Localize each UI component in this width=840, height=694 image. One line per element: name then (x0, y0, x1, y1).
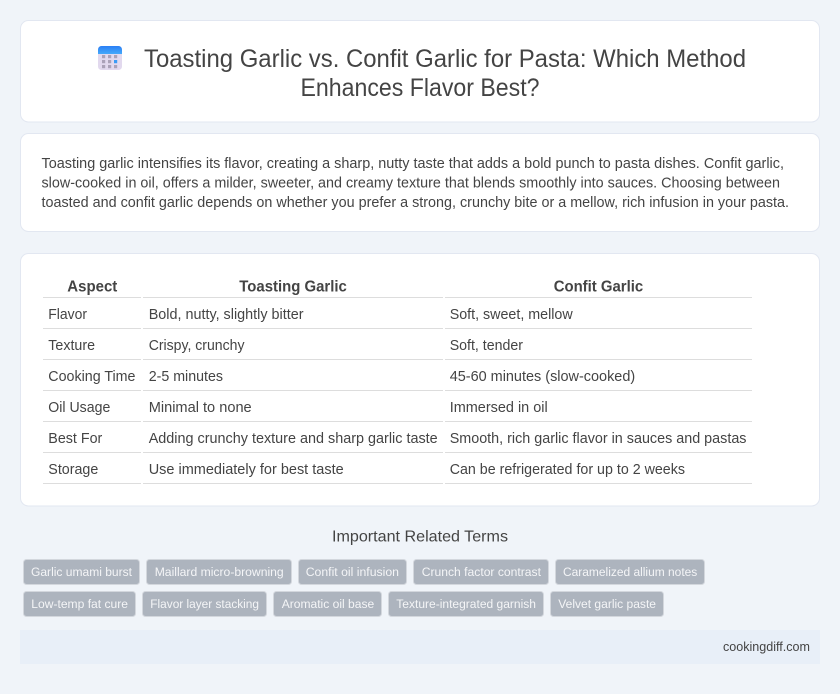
tag: confit oil infusion: Confit oil infusion (306, 565, 399, 579)
row: best for: Adding crunchy texture and sharp garlic taste (149, 431, 438, 447)
row: flavor: Bold, nutty, slightly bitter (149, 307, 304, 323)
title: Enhances Flavor Best? (300, 74, 540, 102)
tag: confit oil infusion (298, 560, 406, 584)
row: best for: Best For (48, 431, 102, 447)
panel: description (20, 134, 820, 232)
tag: maillard micro-browning: Maillard micro-browning (155, 565, 284, 579)
row: cooking time: 2-5 minutes (149, 369, 223, 385)
tag: maillard micro-browning (146, 560, 292, 584)
heading: related terms: Important Related Terms (332, 528, 508, 546)
row: texture (48, 338, 523, 354)
tag: flavor layer stacking: Flavor layer stacking (150, 597, 259, 611)
tag: texture-integrated garnish (388, 592, 544, 616)
row: best for: Smooth, rich garlic flavor in sauces and pastas (450, 431, 746, 447)
panel: related terms tags (24, 560, 704, 616)
footer (20, 630, 820, 664)
row: storage (48, 462, 685, 478)
row: storage: Use immediately for best taste (149, 462, 344, 478)
row: best for (48, 431, 747, 447)
tag: caramelized allium notes: Caramelized allium notes (563, 565, 697, 579)
tag: flavor layer stacking (142, 592, 266, 616)
tag: low-temp fat cure: Low-temp fat cure (31, 597, 128, 611)
row: cooking time: 45-60 minutes (slow-cooked) (450, 369, 635, 385)
tag: caramelized allium notes (556, 560, 704, 584)
row: storage: Can be refrigerated for up to 2 weeks (450, 462, 685, 478)
row: oil usage: Oil Usage (48, 400, 110, 416)
row: cooking time: Cooking Time (48, 369, 135, 385)
row: oil usage (48, 400, 548, 416)
row: flavor: Flavor (48, 307, 87, 323)
footer source text: cookingdiff.com (723, 639, 810, 654)
tag: crunch factor contrast: Crunch factor contrast (422, 565, 542, 579)
description text: slow-cooked in oil, offers a milder, sweeter, and creamy texture that blends smoothly into sauces. Choosing between (42, 176, 780, 192)
tag: garlic umami burst: Garlic umami burst (31, 565, 133, 579)
panel: comparison table (20, 254, 820, 506)
row: texture: Soft, tender (450, 338, 523, 354)
row: texture: Crispy, crunchy (149, 338, 245, 354)
row: oil usage: Immersed in oil (450, 400, 548, 416)
tag: aromatic oil base (274, 592, 382, 616)
description text: Toasting garlic intensifies its flavor, creating a sharp, nutty taste that adds a bold punch to pasta dishes. Confit garlic, (42, 156, 784, 172)
row: texture: Texture (48, 338, 95, 354)
icon: calendar (98, 46, 122, 70)
row: flavor (48, 307, 573, 323)
table header: Aspect (67, 278, 118, 296)
row: flavor: Soft, sweet, mellow (450, 307, 573, 323)
tag: velvet garlic paste (550, 592, 664, 616)
tag: low-temp fat cure (24, 592, 136, 616)
tag: garlic umami burst (24, 560, 140, 584)
title (144, 45, 746, 102)
row: storage: Storage (48, 462, 98, 478)
table header (67, 278, 643, 296)
panel: title card (20, 20, 820, 122)
description text (42, 156, 789, 211)
table header: Toasting Garlic (239, 278, 347, 296)
row: cooking time (48, 369, 635, 385)
table header: Confit Garlic (554, 278, 643, 296)
tag: texture-integrated garnish: Texture-integrated garnish (396, 597, 536, 611)
title: Toasting Garlic vs. Confit Garlic for Pasta: Which Method (144, 45, 746, 73)
row: oil usage: Minimal to none (149, 400, 252, 416)
tag: velvet garlic paste: Velvet garlic paste (558, 597, 656, 611)
tag: crunch factor contrast (414, 560, 548, 584)
tag: aromatic oil base: Aromatic oil base (282, 597, 374, 611)
description text: toasted and confit garlic depends on whether you prefer a strong, crunchy bite or a mellow, rich infusion in your pasta. (42, 195, 789, 211)
